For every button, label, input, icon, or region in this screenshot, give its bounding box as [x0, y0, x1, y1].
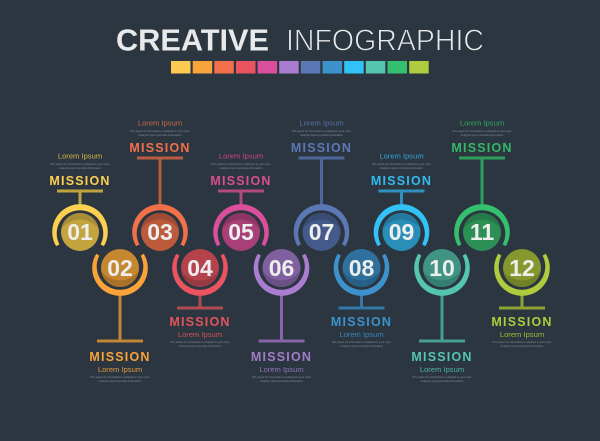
step 02: 02	[107, 255, 133, 281]
title: CREATIVE	[116, 22, 269, 58]
step 12: 12	[509, 255, 535, 281]
step 06: This space for information is adapted to your topic.	[251, 375, 312, 379]
step 01: This space for information is adapted to your topic.	[50, 162, 110, 166]
step 12: MISSION	[491, 315, 553, 329]
step 05	[210, 152, 272, 251]
step 08: This space for information is adapted to your topic.	[331, 340, 392, 344]
step 10	[411, 249, 473, 383]
step 02: Lorem Ipsum	[98, 365, 142, 374]
step 06: Lorem Ipsum	[259, 365, 304, 374]
step 11: MISSION	[451, 141, 513, 155]
step 04	[169, 249, 231, 348]
step 04: MISSION	[169, 315, 231, 329]
step 08: 08	[349, 255, 374, 281]
step 07: Lorem Ipsum	[299, 118, 344, 128]
step 11: Analysis report provides information	[461, 133, 504, 137]
step 09	[371, 152, 432, 251]
step 06: MISSION	[251, 350, 312, 364]
step 07: 07	[309, 219, 334, 245]
step 05: Lorem Ipsum	[219, 152, 263, 160]
step 02: Analysis report provides information	[99, 379, 142, 383]
step 08: MISSION	[331, 315, 392, 329]
step 09: 09	[389, 219, 414, 245]
step 09: This space for information is adapted to your topic.	[371, 162, 432, 166]
step 04: This space for information is adapted to your topic.	[170, 340, 230, 344]
step 07: MISSION	[291, 141, 352, 155]
step 03: Analysis report provides information	[139, 133, 182, 137]
step 07: This space for information is adapted to your topic.	[291, 129, 352, 133]
step 08: Lorem Ipsum	[339, 330, 384, 339]
step 03: This space for information is adapted to your topic.	[130, 129, 190, 133]
step 04: 04	[187, 255, 213, 281]
step 01: Lorem Ipsum	[58, 152, 102, 160]
step 04: Lorem Ipsum	[178, 330, 222, 339]
step 05: MISSION	[210, 174, 272, 188]
step 12	[491, 249, 553, 348]
step 10: MISSION	[411, 350, 473, 364]
step 09: Lorem Ipsum	[379, 152, 424, 160]
step 03: Lorem Ipsum	[138, 118, 182, 128]
step 06: Analysis report provides information	[260, 379, 303, 383]
step 11: This space for information is adapted to your topic.	[452, 129, 512, 133]
step 04: Analysis report provides information	[179, 344, 222, 348]
step 01: MISSION	[49, 174, 111, 188]
step 01: 01	[67, 219, 93, 245]
step 11	[451, 118, 513, 251]
step 08	[331, 249, 392, 348]
step 08: Analysis report provides information	[340, 344, 383, 348]
title	[116, 22, 484, 58]
step 09: MISSION	[371, 174, 432, 188]
step 02: This space for information is adapted to your topic.	[90, 375, 150, 379]
step 05: Analysis report provides information	[220, 166, 263, 170]
step 06: 06	[269, 255, 294, 281]
step 07: Analysis report provides information	[300, 133, 343, 137]
step 03	[129, 118, 191, 251]
step 12: Lorem Ipsum	[500, 330, 544, 339]
step 03: MISSION	[129, 141, 191, 155]
step 01	[49, 152, 111, 251]
step 05: This space for information is adapted to your topic.	[211, 162, 271, 166]
title: INFOGRAPHIC	[286, 22, 484, 58]
step 05: 05	[228, 219, 254, 245]
step 09: Analysis report provides information	[380, 166, 423, 170]
step 10: Analysis report provides information	[421, 379, 464, 383]
step 01: Analysis report provides information	[59, 166, 102, 170]
step 06	[251, 249, 312, 383]
step 10: Lorem Ipsum	[420, 365, 464, 374]
step 07	[291, 118, 352, 251]
step 03: 03	[147, 219, 173, 245]
step 12: Analysis report provides information	[501, 344, 544, 348]
step 02	[89, 249, 151, 383]
step 10: 10	[429, 255, 455, 281]
step 10: This space for information is adapted to your topic.	[412, 375, 472, 379]
step 11: 11	[470, 219, 494, 245]
step 12: This space for information is adapted to your topic.	[492, 340, 552, 344]
step 02: MISSION	[89, 350, 151, 364]
colour swatch strip	[171, 61, 429, 74]
step 11: Lorem Ipsum	[460, 118, 504, 128]
